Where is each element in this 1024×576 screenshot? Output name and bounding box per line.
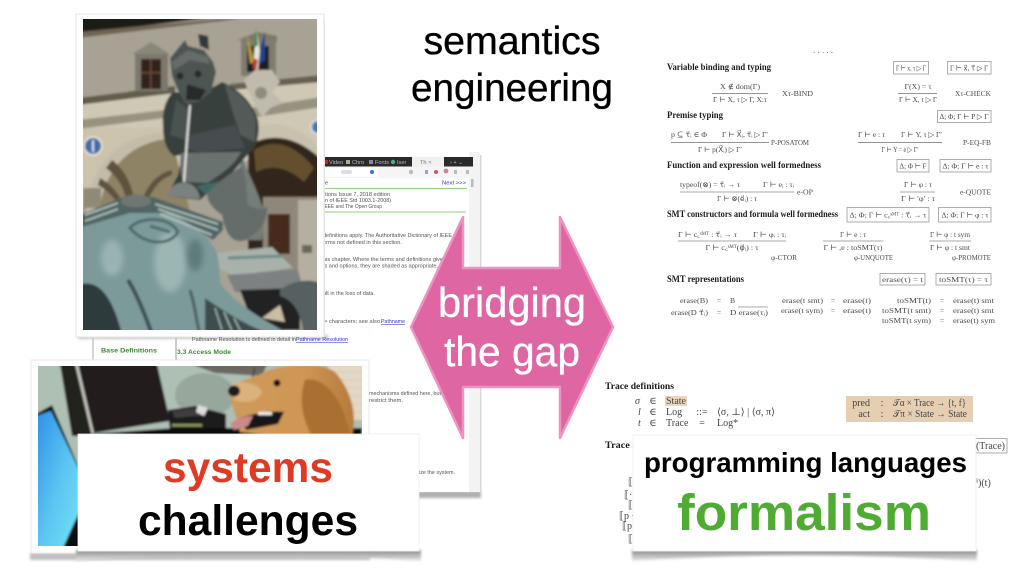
rule: P-PosAtom: Γ ⊢ p(X⃗ᵢ) ▷ Γ′ <box>698 144 742 154</box>
judgment box: function <box>897 160 929 172</box>
equations: erase refinement: erase(t) <box>843 296 872 305</box>
judgment box: variable binding: Γ ⊢ x, τ ▷ Γ <box>896 64 926 72</box>
statue belly <box>180 152 241 183</box>
page content: ize the system. <box>419 470 455 476</box>
grammar: trace definitions: Trace <box>666 418 689 429</box>
grammar: trace definitions: Log* <box>717 418 738 429</box>
rule: e-Quote: Γ ⊢ 'φ' : τ <box>901 194 935 203</box>
judgment box: toSMT <box>936 274 991 285</box>
label card <box>633 435 976 551</box>
equations: erase base <box>671 296 769 317</box>
photo frame <box>76 14 324 337</box>
page content: IEEE and The Open Group <box>323 204 382 210</box>
tab bar: Video <box>329 160 343 166</box>
rule: P-Eq-FB <box>858 130 991 154</box>
equations: toSMT: toSMT(t sym) <box>882 316 932 325</box>
equations: toSMT: erase(t) smt <box>953 296 995 305</box>
heading: premise typing: Premise typing <box>667 111 723 121</box>
rule: phi-Unquote: Γ ⊢ e : τ <box>840 230 866 239</box>
programming languages words: programming languages <box>644 447 967 478</box>
grammar: trace definitions: l <box>638 407 641 418</box>
rule: P-Eq-FB: P-EQ-FB <box>963 138 991 147</box>
blue medallions <box>83 136 103 156</box>
grammar: trace definitions: Log <box>666 407 682 418</box>
laptop <box>36 405 80 548</box>
fragment: semantic function tail: ⁱ)(t) <box>976 478 991 489</box>
rule: phi-Ctor: Γ ⊢ c꜀ˢᴹᵀ : τ⃗ᵢ → τ <box>678 230 737 239</box>
grammar: trace definitions: ::= <box>696 407 708 418</box>
equations: erase refinement: erase(t) <box>843 306 872 315</box>
equations: toSMT: erase(t) sym <box>953 316 995 325</box>
page content: restrict them. <box>369 398 403 404</box>
tower <box>60 364 93 436</box>
panel: typing rules formalism: · · · · · <box>813 48 833 57</box>
statue right thigh <box>207 166 267 241</box>
equations: toSMT: toSMT(t smt) <box>882 306 932 315</box>
judgment box: trace: (Trace) <box>976 441 1005 452</box>
photo shadow <box>30 553 370 560</box>
browser body <box>92 152 480 492</box>
equations: toSMT: = <box>940 306 944 315</box>
page content: ations Issue 7, 2018 edition <box>322 192 390 198</box>
page content: Base Definitions <box>101 348 157 354</box>
fragments: semantic equations: ⟦p + <box>619 511 637 522</box>
judgment box: toSMT: toSMT(τ) = τ <box>939 275 988 284</box>
grammar: trace definitions <box>635 396 775 429</box>
judgment box: SMT constructor: Δ; Φ; Γ ⊢ c꜀ˢᴹᵀ : τ⃗ᵢ → τ <box>850 210 926 220</box>
rule: phi-Ctor: Γ ⊢ φᵢ : τᵢ <box>753 230 787 239</box>
rule: P-PosAtom <box>671 129 809 154</box>
rule: phi-Ctor: φ-CTOR <box>771 253 798 262</box>
rule: P-PosAtom: P-POSATOM <box>771 138 809 147</box>
page content: ult in the loss of data. <box>323 291 375 297</box>
photo: dog and computers <box>36 364 364 548</box>
fragments: semantic equations: ⟦ <box>628 500 633 511</box>
monitor edge <box>75 364 95 436</box>
grammar: trace definitions: ∈ <box>649 396 657 407</box>
rule: P-Eq-FB: Γ ⊢ Y, τ ▷ Γ′ <box>901 130 942 139</box>
water stream <box>184 105 190 182</box>
blinds <box>328 364 364 420</box>
photo frame <box>31 360 369 553</box>
statue left knee <box>167 183 200 199</box>
rule: X tau check: Γ ⊢ X, τ ▷ Γ <box>899 95 938 104</box>
callout: pred and act signatures <box>846 396 973 422</box>
rule: phi-Promote: φ-PROMOTE <box>952 253 991 262</box>
equations: toSMT: toSMT(t) <box>897 296 932 305</box>
label: systems challenges <box>76 434 421 561</box>
rule: e-Op: Γ ⊢ eᵢ : τᵢ <box>763 180 795 189</box>
rule: P-PosAtom: Γ ⊢ X⃗ᵢ, τ⃗ᵢ ▷ Γ′ <box>722 129 768 139</box>
tab bar: › + ⌄ <box>450 160 463 166</box>
grammar: trace definitions: σ <box>635 396 641 407</box>
callout: pred and act signatures: pred <box>852 398 870 409</box>
dog <box>228 365 354 436</box>
photo: statue in front of building <box>78 14 325 334</box>
printer <box>168 406 226 434</box>
rule: P-Eq-FB: Γ ⊢ e : τ <box>858 130 885 139</box>
statue tail behind <box>240 150 265 240</box>
arrow: bridging the gap <box>411 217 613 438</box>
rule: P-Eq-FB: Γ ⊢ Y = e ▷ Γ′ <box>882 145 919 154</box>
equations: erase refinement: = <box>831 306 835 315</box>
equations: erase base: = <box>717 296 721 305</box>
tab bar: Th × <box>420 160 431 166</box>
rule: e-Quote: e-QUOTE <box>960 188 991 196</box>
grammar: trace definitions: = <box>699 418 705 429</box>
rule: P-PosAtom: p ⊆ τ⃗ᵢ ∈ Φ <box>671 130 707 139</box>
heading: trace definitions: Trace definitions <box>605 382 674 392</box>
toolbar <box>320 166 469 178</box>
judgment box: expression <box>940 160 991 172</box>
tab bar: Iser <box>397 160 406 166</box>
rule: phi-Ctor <box>678 230 798 262</box>
page content: > characters; see also <box>324 319 380 325</box>
equations: erase base: erase(B) <box>680 296 709 305</box>
judgment box: formula: Δ; Φ; Γ ⊢ φ : τ <box>942 210 988 220</box>
page content: on of IEEE Std 1003.1-2008) <box>322 198 391 204</box>
panel: trace definitions formalism <box>605 382 1007 545</box>
flags <box>247 34 254 64</box>
rule: X tau check: Xτ-CHECK <box>955 89 991 98</box>
mouth <box>240 411 284 430</box>
grammar: trace definitions: ∈ <box>649 407 657 418</box>
equations: erase base: D erase(τᵢ) <box>730 308 769 317</box>
challenges word: challenges <box>138 498 358 545</box>
fragments: semantic equations: ⟦p <box>622 521 632 532</box>
rule: X tau bind: Γ ⊢ X, τ ▷ Γ, X:τ <box>713 95 767 104</box>
formalism word: formalism <box>677 484 931 541</box>
rule: X tau bind <box>712 82 814 104</box>
panel: dog at desk photo <box>30 360 370 560</box>
page content: ts and options, they are shaded as appropriate. <box>323 264 438 270</box>
systems word: systems <box>163 445 333 492</box>
fragments: semantic equations: ⟦· <box>624 490 632 501</box>
page content: Next >>> <box>442 180 466 186</box>
panel: fountain statue photo <box>76 14 328 339</box>
equations: toSMT: = <box>940 296 944 305</box>
page content: Pathname <box>381 319 405 325</box>
tab bar <box>320 157 473 166</box>
heading: SMT representations: SMT representations <box>667 275 744 285</box>
judgment box: variable binding <box>894 62 928 74</box>
rule: e-Quote: Γ ⊢ φ : τ <box>904 180 932 189</box>
judgment box: variable list <box>948 62 991 74</box>
page content: ne <box>322 180 328 186</box>
callout: pred and act signatures: : <box>881 398 883 409</box>
rule: phi-Unquote: Γ ⊢ ,e : toSMT(τ) <box>824 243 883 252</box>
heading: SMT constructors and formula well formedness: SMT constructors and formula well formedness <box>667 210 838 220</box>
panel: browser window with standard text <box>92 152 482 498</box>
rule: phi-Promote: Γ ⊢ φ : t smt <box>930 243 971 252</box>
fragments: semantic equations <box>619 477 637 545</box>
callout: pred and act signatures: 𝒯α × Trace → {t, f} <box>893 398 966 409</box>
fish tail <box>280 281 322 332</box>
equations: toSMT: = <box>940 316 944 325</box>
judgment box: formula <box>938 208 991 222</box>
coat of arms <box>244 70 283 118</box>
page content: erms not defined in this section. <box>323 240 402 246</box>
rule: e-Op: e-OP <box>797 188 813 196</box>
rule: phi-Promote: Γ ⊢ φ : t sym <box>930 230 970 239</box>
judgment box: expression: Δ; Φ; Γ ⊢ e : τ <box>942 162 988 170</box>
rule: phi-Ctor: Γ ⊢ c꜀ˢᴹᵀ(φ⃗ᵢ) : τ <box>706 243 758 252</box>
fragments: semantic equations: ⟦ <box>628 534 633 545</box>
page content: mechanisms defined here, but <box>369 391 441 397</box>
judgment box: variable list: Γ ⊢ x⃗, τ⃗ ▷ Γ <box>950 64 989 72</box>
tab bar: Fonts <box>375 160 389 166</box>
equations: erase refinement: = <box>831 296 835 305</box>
rule: e-Quote <box>900 180 991 203</box>
label: programming languages formalism <box>632 435 977 561</box>
arches <box>86 183 97 212</box>
judgment box: trace <box>950 438 1007 453</box>
rule: X tau check: Γ(X) = τ <box>904 82 932 91</box>
wall picture <box>192 366 268 377</box>
rule: e-Op: typeof(⊗) = τ⃗ᵢ → τ <box>680 180 740 189</box>
rule: e-Op: Γ ⊢ ⊗(e⃗ᵢ) : τ <box>717 194 757 203</box>
statue head <box>170 40 216 104</box>
rule: X tau bind: X ∉ dom(Γ) <box>720 82 760 91</box>
heading: function and expression well formedness: Function and expression well formedness <box>667 161 821 171</box>
platform shell <box>217 247 293 276</box>
label card <box>78 434 419 551</box>
title: semantics engineering <box>411 20 613 110</box>
browser shadow <box>412 491 481 498</box>
equations: erase refinement: erase(t sym) <box>781 306 824 315</box>
grammar: trace definitions: ∈ <box>649 418 657 429</box>
page content <box>92 180 467 476</box>
fish fin <box>78 197 223 240</box>
grammar: trace definitions: t <box>638 418 641 429</box>
equations: toSMT <box>882 296 995 325</box>
arrow: bridging the gap: the gap <box>444 328 580 375</box>
equations: erase refinement: erase(t smt) <box>782 296 824 305</box>
callout: pred and act signatures: act <box>858 409 870 420</box>
window right <box>237 32 277 42</box>
judgment box: erase: erase(τ) = t <box>882 275 924 284</box>
heading: variable binding and typing: Variable binding and typing <box>667 63 771 73</box>
equations: erase base: = <box>717 308 721 317</box>
rule: phi-Unquote <box>823 230 893 262</box>
text: pathname resolution line <box>192 337 348 343</box>
big fish <box>78 211 290 334</box>
title: semantics engineering: engineering <box>411 67 613 110</box>
highlight: state <box>665 396 687 406</box>
rule: phi-Unquote: φ-UNQUOTE <box>854 253 893 262</box>
fragments: semantic equations: ⟦ <box>628 477 633 488</box>
judgment box: premise: Δ; Φ; Γ ⊢ P ▷ Γ <box>940 112 989 121</box>
label shadow <box>632 550 977 561</box>
title: semantics engineering: semantics <box>424 20 600 63</box>
page content: definitions apply. The Authoritative Dictionary of IEEE <box>323 233 452 239</box>
arrow: bridging the gap: bridging <box>438 279 586 326</box>
monitor <box>78 364 170 433</box>
equations: erase base: B <box>730 296 735 305</box>
page content: his chapter. Where the terms and definitions give <box>323 257 443 263</box>
window left <box>132 42 170 54</box>
grammar: trace definitions: ⟨σ, ⊥⟩ | ⟨σ, π⟩ <box>717 407 775 418</box>
panel: typing rules formalism <box>667 48 995 325</box>
page content: 3.3 Access Mode <box>177 349 231 356</box>
equations: toSMT: erase(t) smt <box>953 306 995 315</box>
callout: pred and act signatures: 𝒯π × State → State <box>893 409 968 420</box>
label shadow <box>76 550 421 561</box>
heading: trace semantics: Trace semantics <box>605 441 675 451</box>
equations: erase base: erase(D τ⃗ᵢ) <box>671 308 709 317</box>
rule: phi-Promote <box>929 230 991 262</box>
statue torso <box>163 82 259 200</box>
lower wall <box>83 81 317 168</box>
photo shadow <box>78 335 328 339</box>
judgment box: function: Δ; Φ ⊢ F <box>900 162 926 170</box>
rule: X tau check <box>898 82 991 104</box>
judgment box: erase <box>880 274 925 285</box>
grammar: trace definitions: State <box>666 396 687 407</box>
equations: erase refinement <box>781 296 872 315</box>
rule: e-Op <box>680 180 813 203</box>
judgment box: SMT constructor <box>847 208 929 222</box>
tab bar: Chro <box>352 160 364 166</box>
text: pathname resolution line: Pathname Resolution <box>296 337 348 343</box>
callout: pred and act signatures: : <box>881 409 883 420</box>
rule: X tau bind: Xτ-BIND <box>782 89 814 98</box>
text: pathname resolution line: Pathname Resolution is defined in detail in <box>192 337 296 343</box>
